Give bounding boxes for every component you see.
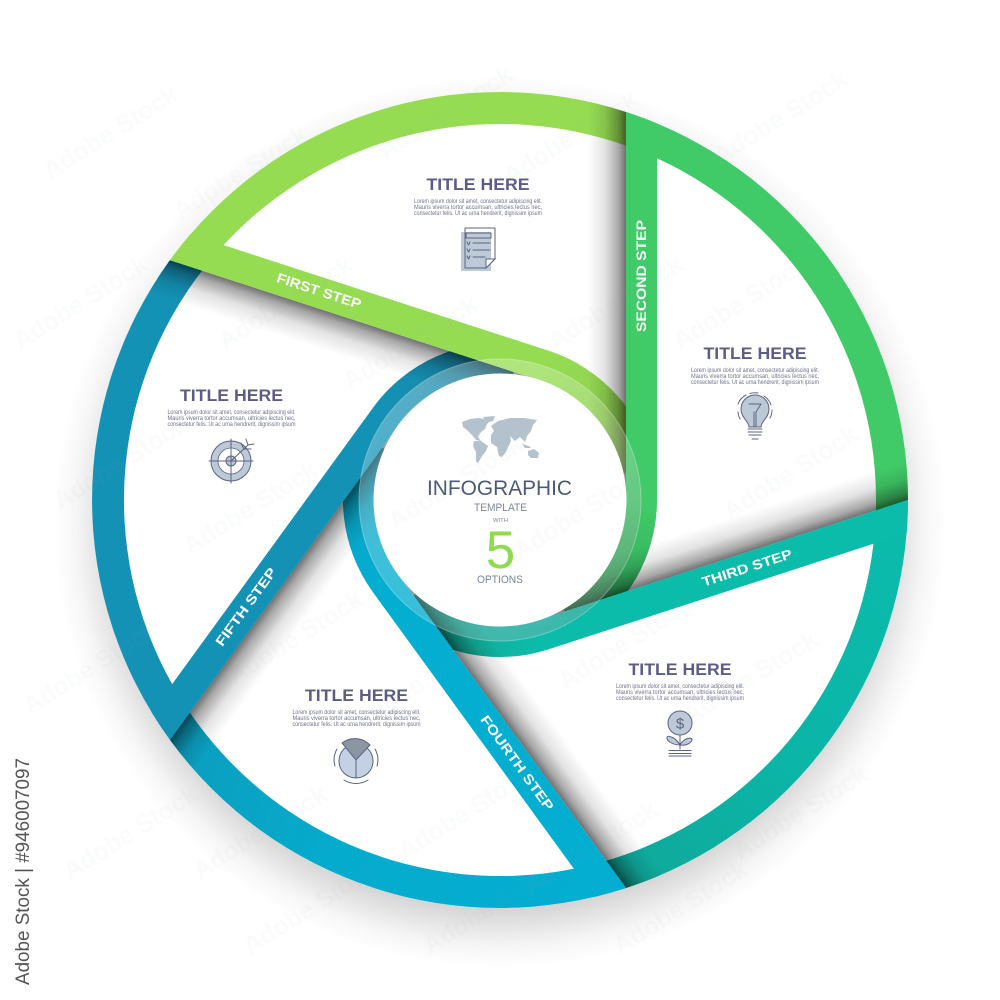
text block: first: Lorem ipsum dolor sit amet, consectetur adipiscing elit. — [414, 199, 542, 205]
watermark pattern: Adobe Stock — [168, 120, 313, 225]
center subtitle: with: WITH — [493, 518, 508, 524]
watermark pattern: Adobe Stock — [223, 585, 368, 690]
watermark pattern: Adobe Stock — [543, 250, 688, 355]
center number 5: 5 — [486, 521, 515, 580]
stock id vertical text: Adobe Stock | #946007097 — [13, 758, 34, 985]
text block: third: TITLE HERE — [628, 660, 732, 679]
band: fifth step — [0, 150, 529, 777]
spoke: first step — [170, 231, 549, 380]
text block: second: Lorem ipsum dolor sit amet, consectetur adipiscing elit. — [691, 368, 819, 374]
label: fifth step: FIFTH STEP — [213, 565, 279, 649]
text block: fourth — [292, 686, 421, 728]
center white circle — [374, 374, 626, 626]
watermark pattern: Adobe Stock — [728, 760, 873, 865]
watermark pattern: Adobe Stock — [348, 630, 493, 735]
spoke: second step — [626, 112, 657, 500]
text block: fourth: TITLE HERE — [305, 686, 408, 705]
watermark pattern: Adobe Stock — [18, 615, 163, 720]
band: fourth step — [90, 427, 677, 1000]
watermark pattern: Adobe Stock — [188, 780, 333, 885]
watermark pattern: Adobe Stock — [48, 410, 193, 515]
text block: second — [691, 344, 819, 386]
text block: fourth: Mauris viverra tortor accumsan, ultricies lectus nec, — [292, 716, 421, 722]
label: second step: SECOND STEP — [634, 220, 649, 332]
drop shadow of the wheel — [54, 76, 946, 968]
icon: target with arrow — [209, 439, 254, 483]
watermark pattern: Adobe Stock — [668, 250, 813, 355]
watermark pattern: Adobe Stock — [393, 760, 538, 865]
icon: dollar plant — [667, 711, 692, 756]
icon: light bulb — [738, 393, 772, 439]
text block: first: Mauris viverra tortor accumsan, ultricies lectus nec, — [414, 205, 542, 211]
watermark pattern: Adobe Stock — [498, 85, 643, 190]
center title: INFOGRAPHIC — [427, 477, 572, 500]
spoke: fourth step — [373, 574, 626, 906]
center subtitle: template: TEMPLATE — [474, 502, 527, 514]
watermark pattern: Adobe Stock — [373, 60, 518, 165]
icon: pie chart — [334, 739, 378, 784]
watermark pattern: Adobe Stock — [338, 290, 483, 395]
spoke shadows — [137, 90, 929, 906]
text block: fifth: Lorem ipsum dolor sit amet, consectetur adipiscing elit. — [168, 410, 296, 416]
watermark pattern: Adobe Stock — [383, 430, 528, 535]
text block: second: consectetur felis. Ut ac urna hendrerit, dignissim ipsum — [691, 380, 819, 386]
text block: third: consectetur felis. Ut ac urna hendrerit, dignissim ipsum — [616, 696, 744, 702]
text block: third: Lorem ipsum dolor sit amet, consectetur adipiscing elit. — [616, 684, 744, 690]
text block: third — [616, 660, 744, 702]
watermark pattern: Adobe Stock — [238, 855, 383, 960]
watermark pattern: Adobe Stock — [178, 455, 323, 560]
watermark pattern: Adobe Stock — [58, 780, 203, 885]
watermark pattern: Adobe Stock — [678, 625, 823, 730]
watermark pattern: Adobe Stock — [608, 855, 753, 960]
band: first step — [150, 0, 755, 482]
label: first step: FIRST STEP — [275, 270, 363, 312]
icon: dollar plant: $ — [676, 716, 685, 732]
label: third step: THIRD STEP — [700, 546, 794, 590]
text block: third: Mauris viverra tortor accumsan, ultricies lectus nec, — [616, 690, 744, 696]
watermark pattern — [8, 60, 873, 960]
watermark pattern: Adobe Stock — [508, 460, 653, 565]
text block: first: consectetur felis. Ut ac urna hendrerit, dignissim ipsum — [414, 211, 542, 217]
watermark pattern: Adobe Stock — [213, 250, 358, 355]
text block: second: TITLE HERE — [704, 344, 806, 363]
text block: fifth — [168, 386, 296, 428]
band: second step — [563, 112, 908, 636]
spoke: third step — [538, 500, 918, 649]
text block: first — [414, 175, 542, 217]
text block: second: Mauris viverra tortor accumsan, ultricies lectus nec, — [691, 374, 819, 380]
watermark pattern: Adobe Stock — [708, 65, 853, 170]
text block: fifth: TITLE HERE — [180, 386, 283, 405]
icon: world map — [462, 416, 539, 463]
text block: fourth: consectetur felis. Ut ac urna hendrerit, dignissim ipsum — [292, 722, 420, 728]
text block: fifth: consectetur felis. Ut ac urna hendrerit, dignissim ipsum — [168, 422, 296, 428]
watermark pattern: Adobe Stock — [718, 420, 863, 525]
watermark pattern: Adobe Stock — [518, 795, 663, 900]
spoke: fifth step — [145, 407, 398, 740]
watermark pattern: Adobe Stock — [418, 855, 563, 960]
label: fourth step: FOURTH STEP — [477, 712, 557, 814]
watermark pattern: Adobe Stock — [8, 250, 153, 355]
watermark pattern: Adobe Stock — [38, 80, 183, 185]
watermark pattern: Adobe Stock — [553, 590, 698, 695]
center subtitle: options: OPTIONS — [477, 574, 523, 586]
text block: fourth: Lorem ipsum dolor sit amet, consectetur adipiscing elit. — [292, 710, 421, 716]
text block: first: TITLE HERE — [426, 175, 530, 194]
text block: fifth: Mauris viverra tortor accumsan, ultricies lectus nec, — [168, 416, 296, 422]
white wheel base — [92, 92, 908, 908]
glass ring — [359, 359, 641, 641]
icon: document checklist — [461, 228, 495, 271]
band: third step — [390, 440, 995, 930]
